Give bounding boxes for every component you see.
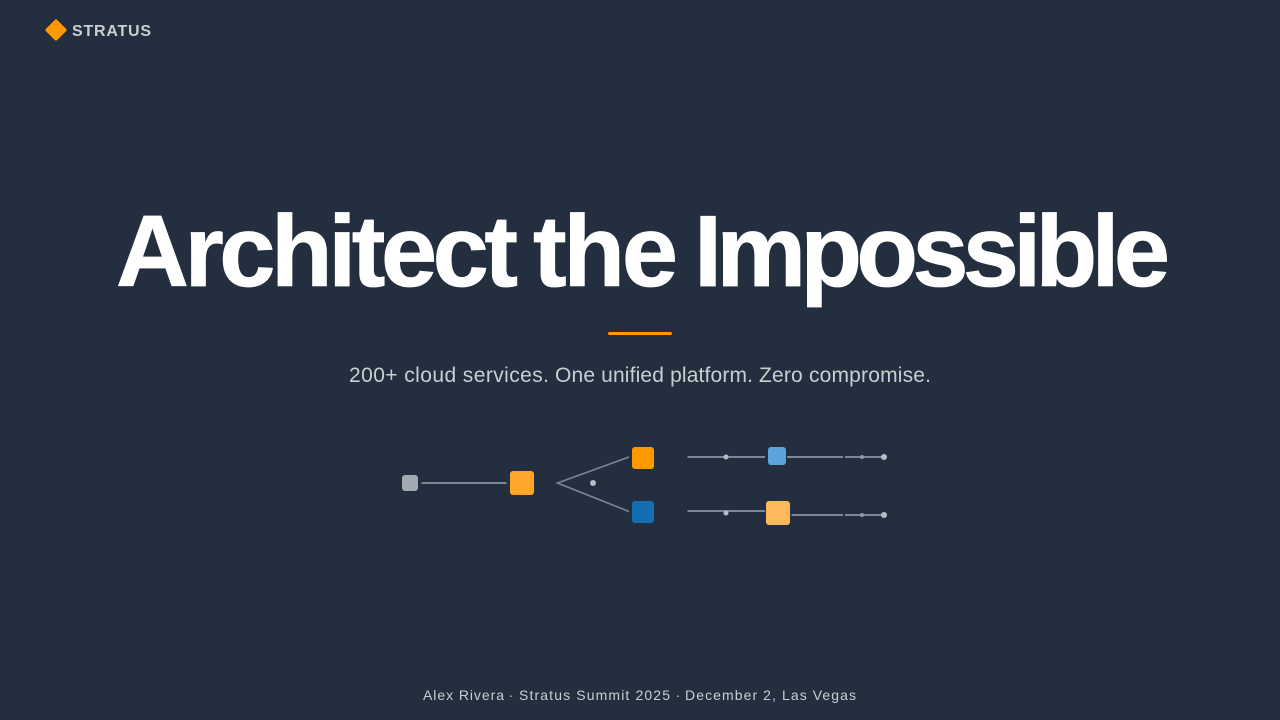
title: Architect [116,196,518,308]
node: light blue [768,447,786,465]
subtitle [349,364,931,387]
footer [423,687,856,703]
subtitle: Zero compromise. [759,364,931,387]
architecture diagram [402,447,887,525]
upper end line [845,456,884,458]
connector: source to hub [422,482,506,484]
title [116,196,1170,308]
upper dot [724,454,728,460]
node: source [402,475,418,491]
subtitle: 200+ cloud services. [349,364,549,387]
connector: fork [558,457,629,512]
lower line output [792,514,843,516]
lower line segment [688,510,765,512]
footer: December 2, Las Vegas [685,687,856,703]
node: blue service [632,501,654,523]
logo [45,19,151,41]
footer: Alex Rivera [423,687,504,703]
lower dot [724,510,728,516]
upper line output [787,456,843,458]
node: light orange [766,501,790,525]
lower end line [845,514,884,516]
upper pipeline [688,447,887,465]
icon: orange diamond [45,19,67,41]
footer: Stratus Summit 2025 [519,687,670,703]
subtitle: One unified platform. [555,364,753,387]
title: the [533,196,678,308]
lower pipeline [688,501,887,525]
lower end dot [881,512,887,518]
upper small dot [860,455,864,459]
fork dot [590,480,596,486]
footer: · [508,687,513,703]
accent divider [608,332,672,335]
upper end dot [881,454,887,460]
footer: · [676,687,680,703]
upper line segment [688,456,765,458]
node: hub [510,471,534,495]
node: orange service [632,447,654,469]
title: Impossible [694,196,1170,308]
brand name: STRATUS [72,23,151,40]
lower small dot [860,513,864,517]
